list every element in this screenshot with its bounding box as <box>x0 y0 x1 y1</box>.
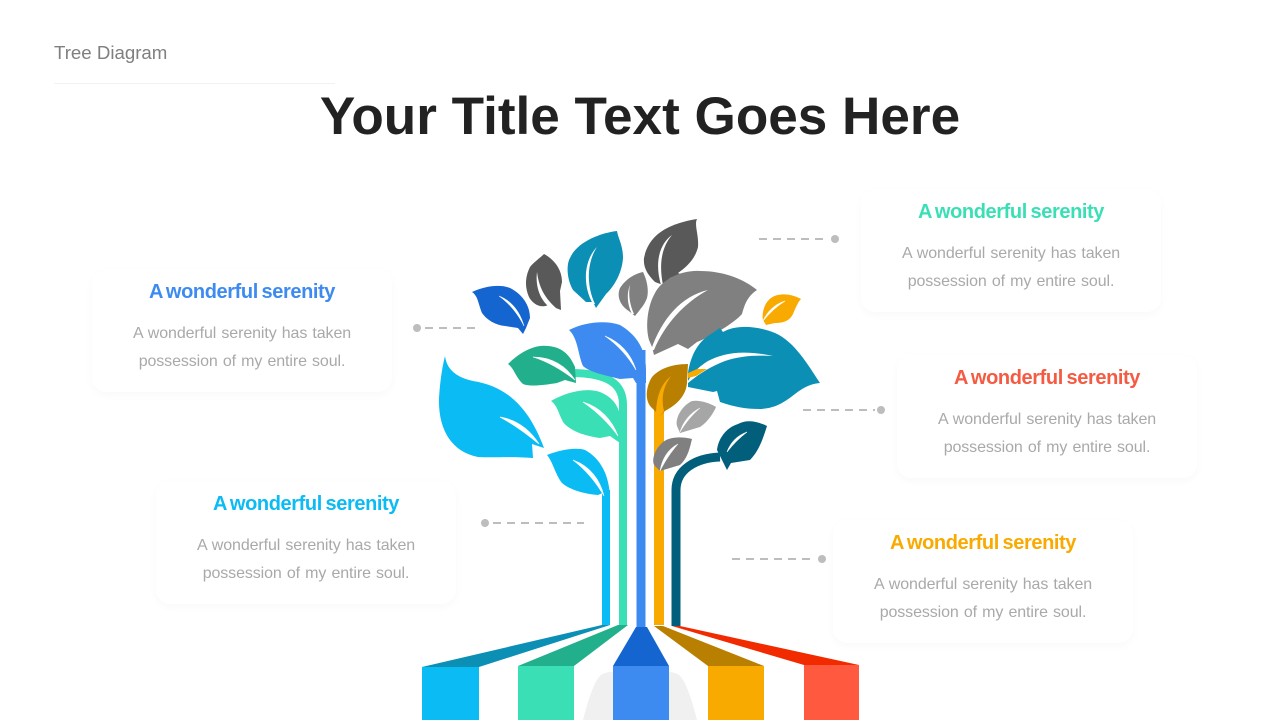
card: green: A wonderful serenity <box>918 201 1104 223</box>
connector: blue card <box>413 324 476 332</box>
leaf: brown <box>647 364 688 416</box>
section label: Tree Diagram <box>54 42 167 63</box>
leaf: small orange <box>763 294 801 325</box>
connector: green card <box>759 235 839 243</box>
leaf: dark gray <box>526 254 562 310</box>
stems <box>575 350 720 627</box>
card: orange <box>833 520 1133 643</box>
leaf: bright blue <box>569 322 646 383</box>
card: cyan: A wonderful serenity <box>213 493 399 515</box>
card: red: possession of my entire soul. <box>944 439 1150 456</box>
leaf: dark green <box>508 346 576 386</box>
connector: orange card <box>732 555 826 563</box>
card: red: A wonderful serenity has taken <box>938 411 1156 428</box>
card: orange: A wonderful serenity <box>890 532 1076 554</box>
connector: red card <box>803 406 885 414</box>
card: orange: A wonderful serenity has taken <box>874 576 1092 593</box>
leaf: small cyan <box>547 449 610 500</box>
card: blue: possession of my entire soul. <box>139 353 345 370</box>
card: green: possession of my entire soul. <box>908 273 1114 290</box>
base columns <box>422 625 859 720</box>
card: cyan: possession of my entire soul. <box>203 565 409 582</box>
connector: cyan card <box>481 519 584 527</box>
leaf: dark teal <box>717 421 767 470</box>
leaf: top dark gray <box>644 219 698 285</box>
card: green: A wonderful serenity has taken <box>902 245 1120 262</box>
leaf: light gray <box>677 401 716 433</box>
leaf: small gray <box>619 272 648 316</box>
card: blue: A wonderful serenity <box>149 281 335 303</box>
leaf: teal top <box>568 231 623 308</box>
card: red: A wonderful serenity <box>954 367 1140 389</box>
card: blue <box>92 269 392 392</box>
leaf: large teal <box>688 327 820 409</box>
leaf: large gray <box>647 271 757 355</box>
title: Your Title Text Goes Here <box>320 87 960 146</box>
leaf: lower gray <box>653 437 692 471</box>
base shadow <box>583 672 697 720</box>
card: red <box>897 355 1197 478</box>
leaf: dark blue <box>472 286 530 334</box>
card: green <box>861 189 1161 312</box>
card: cyan <box>156 481 456 604</box>
leaf: light green <box>551 390 620 443</box>
card: cyan: A wonderful serenity has taken <box>197 537 415 554</box>
leaf: large cyan <box>439 356 544 458</box>
card: blue: A wonderful serenity has taken <box>133 325 351 342</box>
card: orange: possession of my entire soul. <box>880 604 1086 621</box>
